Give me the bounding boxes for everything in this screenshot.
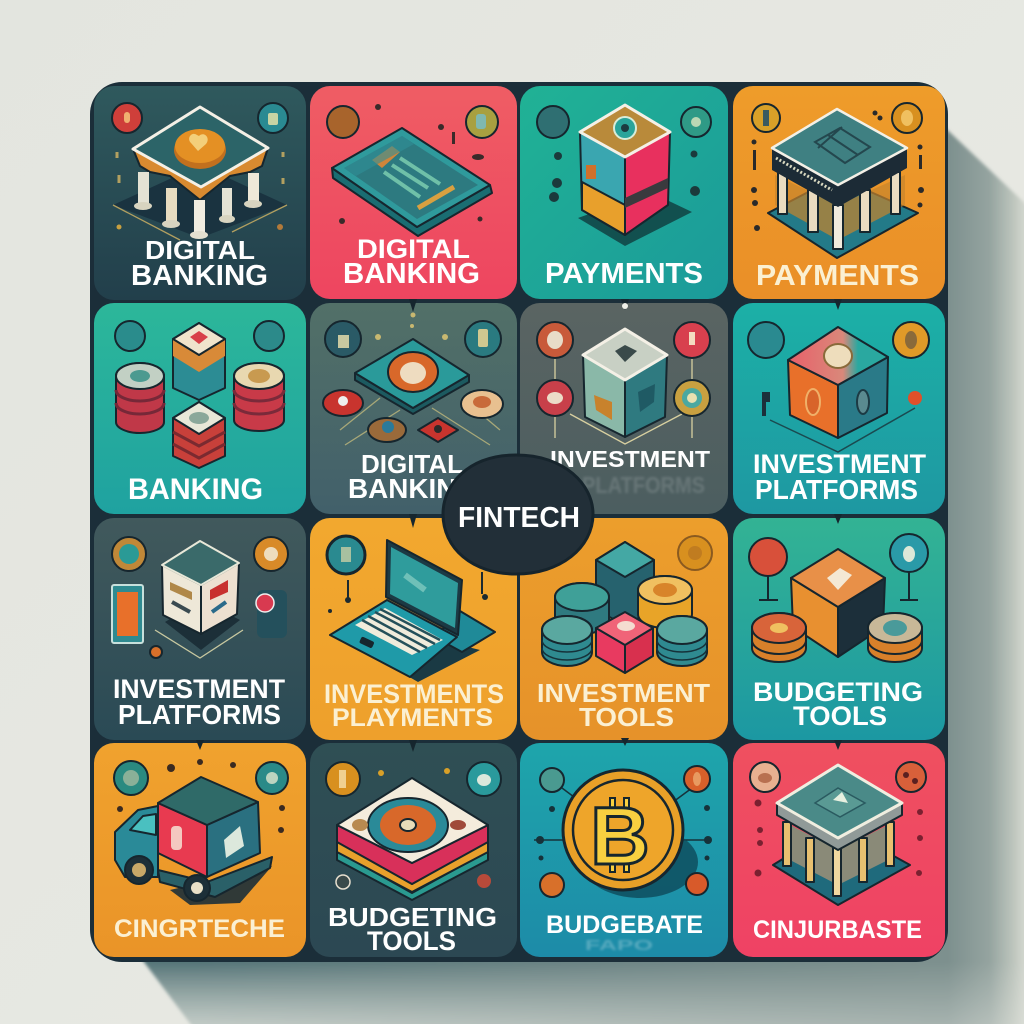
icon: red tile <box>323 390 363 416</box>
label <box>343 234 480 290</box>
panel background <box>310 303 517 514</box>
icon: teal badge <box>748 322 784 358</box>
label: BANKING <box>348 473 478 504</box>
connector notches between panels <box>196 299 842 752</box>
panel: payments teal <box>520 86 728 299</box>
board <box>90 82 948 962</box>
icon: left key <box>762 392 770 416</box>
icon: blue tile <box>368 418 406 442</box>
icon: left badge <box>114 761 148 795</box>
icon: bank pedestal <box>113 107 287 240</box>
icon: red badge <box>112 103 142 133</box>
icon: box and coins <box>752 549 922 662</box>
label <box>753 677 923 731</box>
icon: cube <box>788 327 888 438</box>
panel: digital banking grey <box>310 303 517 514</box>
panel: investment grey <box>520 303 728 514</box>
panel background <box>310 518 517 740</box>
icon: side dots <box>336 768 491 889</box>
dots <box>536 805 712 860</box>
icon: cream tile <box>461 390 503 418</box>
connector lines <box>555 358 692 444</box>
icon: blue badge <box>890 534 928 572</box>
panel background <box>310 86 517 299</box>
panel background <box>520 303 728 514</box>
panel background <box>520 86 728 299</box>
icon: central tile <box>355 339 469 414</box>
label <box>324 679 504 732</box>
label: INVESTMENT <box>537 678 710 708</box>
label: PAYMENTS <box>756 260 919 292</box>
icon: upper left badge <box>537 322 573 358</box>
icon: right badge <box>896 762 926 792</box>
icon: top left badge <box>540 768 564 792</box>
icon: teal badge <box>327 536 365 574</box>
label <box>131 235 268 292</box>
panel background <box>520 743 728 957</box>
icon: top right badge <box>465 321 501 357</box>
icon: small red badge <box>908 391 922 405</box>
dots <box>117 152 283 184</box>
icon: bank pedestal <box>768 109 918 258</box>
icon: laptop <box>330 540 495 682</box>
panel background <box>520 518 728 740</box>
icon: left badge <box>115 321 145 351</box>
badge stands <box>759 572 918 600</box>
label: TOOLS <box>367 926 456 956</box>
icon: top right badge <box>684 766 710 792</box>
icon: left stack <box>116 363 164 433</box>
label: FAPO <box>585 937 654 954</box>
label: INVESTMENT <box>550 446 710 472</box>
icon: gold badge <box>752 104 780 132</box>
panel background <box>94 743 306 957</box>
network lines <box>340 398 500 445</box>
icon: top left badge <box>325 321 361 357</box>
panel: investment tools orange <box>520 518 728 740</box>
icon: left badge <box>750 762 780 792</box>
icon: bottom left badge <box>540 873 564 897</box>
icon: small shield <box>150 646 162 658</box>
icon: cube <box>162 541 239 634</box>
panel background <box>733 303 945 514</box>
icon: delivery truck <box>115 777 272 905</box>
icon: lower right badge <box>674 380 710 416</box>
label: PAYMENTS <box>545 258 703 290</box>
icon: red badge <box>749 538 787 576</box>
panel background <box>310 743 517 957</box>
label: TOOLS <box>579 702 674 732</box>
icon: right stack <box>234 363 284 431</box>
label <box>113 674 285 730</box>
icon: bank pedestal <box>773 765 910 905</box>
panel: investment platforms teal <box>733 303 945 514</box>
icon: left badge <box>112 537 146 571</box>
icon: payment box <box>578 105 692 246</box>
icon: coin shadow <box>582 826 698 898</box>
connector lines <box>534 788 710 840</box>
icon: bottom right badge <box>686 873 708 895</box>
label: BANKING <box>131 260 268 292</box>
panel background <box>94 303 306 514</box>
board drop shadow <box>120 104 1024 1024</box>
icon: bitcoin coin <box>563 770 683 890</box>
dots <box>339 104 484 224</box>
icon: back stack <box>173 323 225 400</box>
icon: right badge <box>254 321 284 351</box>
label: DIGITAL <box>357 234 470 264</box>
label <box>328 902 497 956</box>
icon: coin and box pile <box>542 542 707 673</box>
icon: lower left badge <box>537 380 573 416</box>
label: PLATFORMS <box>755 474 918 505</box>
panel: investments payments yellow <box>310 518 517 740</box>
icon: right badge <box>256 762 288 794</box>
panel: cingrtech orange <box>94 743 306 957</box>
badge shape <box>443 455 593 574</box>
icon: right badge <box>254 537 288 571</box>
icon: bitcoin coin: B <box>590 791 650 882</box>
panel background <box>733 743 945 957</box>
dots <box>754 800 923 876</box>
label: INVESTMENT <box>113 674 285 704</box>
dots <box>751 110 924 231</box>
label: BUDGEBATE <box>546 911 703 939</box>
dots <box>328 572 488 613</box>
icon: phone <box>112 585 143 643</box>
label: INVESTMENTS <box>324 679 504 709</box>
badge label: FINTECH <box>458 502 580 534</box>
icon: red diamond tile <box>418 418 458 442</box>
icon: teal badge <box>258 103 288 133</box>
panel background <box>733 86 945 299</box>
icon: orange badge <box>893 322 929 358</box>
icon: green badge <box>681 107 711 137</box>
label <box>550 446 710 498</box>
panel: budgeting tools teal <box>733 518 945 740</box>
dots <box>117 759 285 833</box>
label <box>753 449 926 505</box>
panel background <box>733 518 945 740</box>
icon: front stack <box>173 402 225 468</box>
label: BANKING <box>128 473 263 506</box>
label <box>537 678 710 732</box>
icon: orange badge <box>678 536 712 570</box>
label: PLAYMENTS <box>332 704 493 732</box>
panel: bitcoin blue <box>520 743 728 957</box>
label: DIGITAL <box>361 449 463 479</box>
dots <box>375 312 448 340</box>
panel: investment platforms dark <box>94 518 306 740</box>
icon: upper right badge <box>674 322 710 358</box>
panel: payments orange <box>733 86 945 299</box>
panel background <box>94 86 306 300</box>
icon: device with key <box>256 590 287 638</box>
icon: gold badge <box>326 762 360 796</box>
ground lines <box>155 630 243 658</box>
center badge: fintech <box>443 455 593 574</box>
icon: cube <box>583 329 667 437</box>
panel: digital banking dark <box>94 86 306 300</box>
icon: tablet <box>332 128 492 236</box>
label <box>348 449 478 504</box>
icon: orange badge <box>892 103 922 133</box>
dots <box>549 150 700 202</box>
icon: dark teal badge <box>537 106 569 138</box>
ground lines <box>770 408 915 452</box>
label: BANKING <box>343 258 480 290</box>
label: DIGITAL <box>145 235 255 265</box>
icon: teal badge <box>467 762 501 796</box>
label: INVESTMENT <box>753 449 926 479</box>
label: TOOLS <box>793 701 887 731</box>
panel: budgeting tools dark <box>310 743 517 957</box>
label: BUDGETING <box>753 677 923 707</box>
label: CINJURBASTE <box>753 916 922 944</box>
icon: layered card stack <box>337 778 488 900</box>
icon: brown badge <box>327 106 359 138</box>
label: CINGRTECHE <box>114 915 285 943</box>
panel: banking teal <box>94 303 306 514</box>
label: BUDGETING <box>328 902 497 932</box>
label <box>546 911 703 954</box>
label: PLATFORMS <box>118 699 281 730</box>
panel background <box>94 518 306 740</box>
panel: digital banking red <box>310 86 517 299</box>
label: PLATFORMS <box>582 472 705 498</box>
panel: cinjurbaste red <box>733 743 945 957</box>
icon: olive badge <box>466 106 498 138</box>
